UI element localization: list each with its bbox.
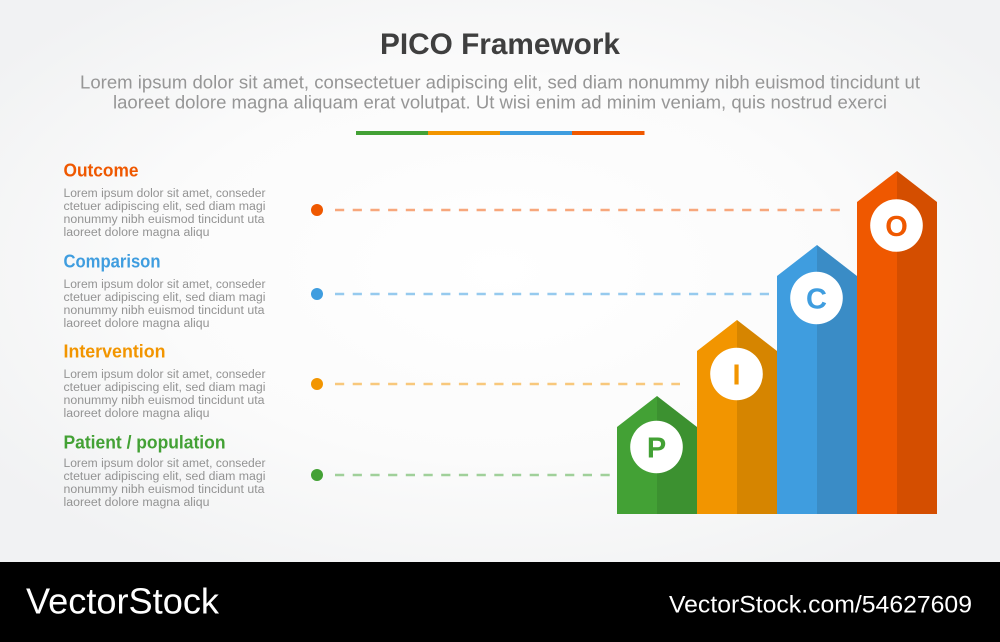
text block: Patient / population: Patient / population <box>64 432 226 452</box>
connector: Comparison <box>311 288 770 300</box>
text block: Intervention: Intervention <box>64 342 166 362</box>
text block: Outcome: Outcome <box>64 160 138 180</box>
text block: Comparison: laoreet dolore magna aliqu <box>64 318 210 330</box>
text block: Outcome: nonummy nibh euismod tincidunt uta <box>64 214 265 226</box>
text block: Patient / population: ctetuer adipiscing elit, sed diam magi <box>64 471 266 483</box>
watermark footer band: VectorStock.com/54627609 <box>669 592 972 618</box>
watermark footer band: VectorStock <box>26 580 220 622</box>
text block: Comparison: Lorem ipsum dolor sit amet, conseder <box>64 279 266 291</box>
watermark footer band <box>0 562 1000 642</box>
subtitle text: Lorem ipsum dolor sit amet, consectetuer adipiscing elit, sed diam nonummy nibh euismod tincidunt ut <box>80 72 920 92</box>
connector: Patient <box>311 469 610 481</box>
text block: Comparison: Comparison <box>64 252 160 272</box>
connector: Intervention <box>311 378 680 390</box>
arrow bar: O <box>857 171 937 514</box>
arrow bar: C <box>777 245 857 514</box>
title: PICO Framework <box>380 28 620 61</box>
text block: Comparison: nonummy nibh euismod tincidunt uta <box>64 305 265 317</box>
text block: Outcome: ctetuer adipiscing elit, sed diam magi <box>64 201 266 213</box>
text block: Intervention: nonummy nibh euismod tincidunt uta <box>64 395 265 407</box>
arrow bar: O: O <box>885 211 908 243</box>
text block: Patient / population: laoreet dolore magna aliqu <box>64 497 210 509</box>
text block: Intervention: Lorem ipsum dolor sit amet, conseder <box>64 369 266 381</box>
text block: Patient / population: Lorem ipsum dolor sit amet, conseder <box>64 458 266 470</box>
arrow bar: P: P <box>647 432 666 464</box>
text block: Outcome: Lorem ipsum dolor sit amet, conseder <box>64 188 266 200</box>
text block: Intervention: ctetuer adipiscing elit, sed diam magi <box>64 382 266 394</box>
text block: Patient / population: nonummy nibh euismod tincidunt uta <box>64 484 265 496</box>
arrow bar: I <box>697 320 777 514</box>
connector: Outcome <box>311 204 840 216</box>
subtitle text <box>80 72 920 112</box>
subtitle text: laoreet dolore magna aliquam erat volutpat. Ut wisi enim ad minim veniam, quis nostrud exerci <box>113 92 887 112</box>
text block: Outcome <box>64 160 266 239</box>
text block: Patient / population <box>64 432 266 509</box>
text block: Comparison: ctetuer adipiscing elit, sed diam magi <box>64 292 266 304</box>
text block: Intervention: laoreet dolore magna aliqu <box>64 408 210 420</box>
arrow bar: C: C <box>806 284 827 316</box>
arrow bar: P <box>617 396 697 514</box>
arrow bar: I: I <box>732 360 741 392</box>
text block: Comparison <box>64 252 266 330</box>
text block: Outcome: laoreet dolore magna aliqu <box>64 227 210 239</box>
title divider bar <box>356 131 644 135</box>
text block: Intervention <box>64 342 266 420</box>
